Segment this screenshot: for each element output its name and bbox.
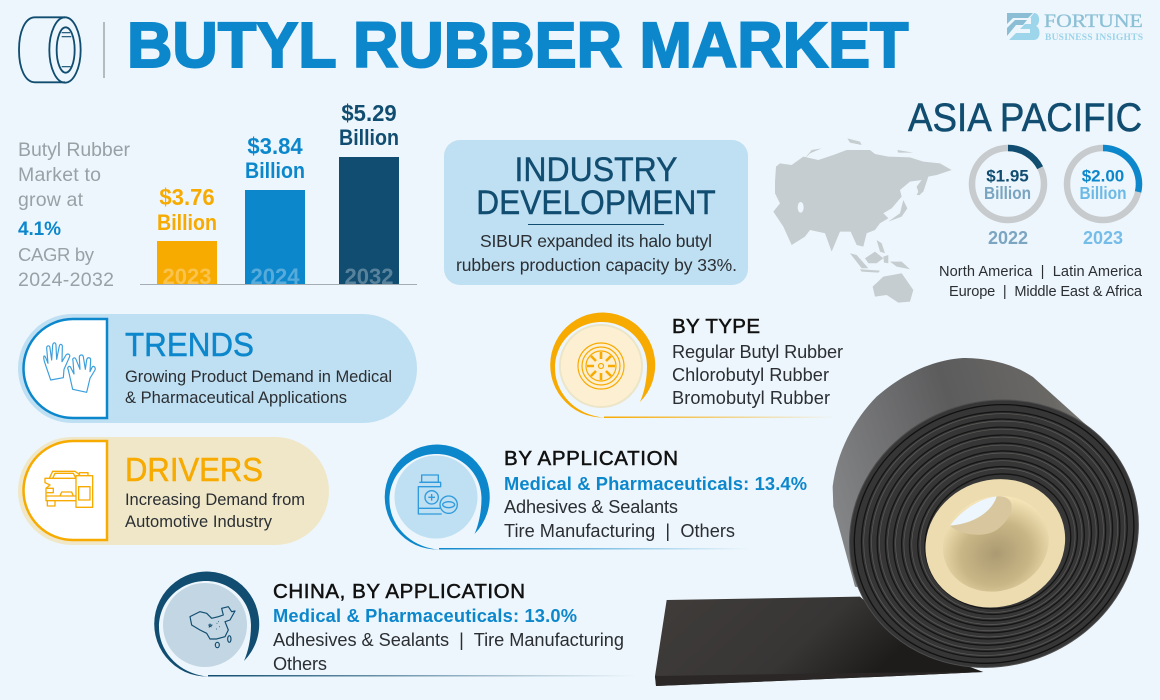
bar chart — [140, 101, 417, 289]
heading: Asia Pacific: ASIA PACIFIC — [908, 96, 1142, 140]
bar 2032 — [339, 101, 399, 289]
flat sheet — [655, 597, 983, 686]
CAGR text block: Butyl Rubber — [18, 139, 130, 161]
bar 2023 — [157, 185, 217, 289]
panel: industry development: rubbers production capacity by 33%. — [456, 255, 737, 275]
bar 2032: 2032 — [345, 264, 393, 289]
panel: industry development — [444, 140, 748, 285]
segment: China by application — [154, 572, 636, 677]
segment: by application — [385, 445, 807, 550]
divider — [103, 22, 105, 78]
map: Asia Pacific — [773, 138, 952, 303]
donut 2022: $1.95 — [986, 166, 1029, 186]
panel: industry development: INDUSTRY — [514, 150, 678, 188]
bar 2023: $3.76 — [159, 185, 215, 210]
other regions: Europe | Middle East & Africa — [949, 284, 1143, 300]
donut 2023 — [1067, 148, 1139, 248]
CAGR text block: 2024-2032 — [18, 269, 114, 291]
panel: industry development: DEVELOPMENT — [476, 183, 716, 221]
panel: drivers: DRIVERS — [125, 451, 263, 488]
panel: drivers: Increasing Demand from — [125, 491, 305, 509]
panel: industry development: SIBUR expanded its halo butyl — [480, 231, 712, 251]
segment: by application: Medical & Pharmaceuticals: 13.4% — [504, 473, 807, 494]
segment: by type: Chlorobutyl Rubber — [672, 365, 829, 385]
bar 2023: Billion — [157, 211, 217, 235]
other regions: North America | Latin America — [939, 264, 1143, 280]
segment: by application: BY APPLICATION — [504, 447, 678, 470]
segment: by type: Regular Butyl Rubber — [672, 342, 843, 362]
bar 2023: 2023 — [163, 264, 211, 289]
donut 2022: 2022 — [988, 228, 1028, 248]
panel: trends: & Pharmaceutical Applications — [125, 389, 347, 407]
segment: by type — [550, 313, 843, 418]
CAGR text block: Market to — [18, 164, 101, 186]
panel: trends: Growing Product Demand in Medical — [125, 368, 392, 386]
donut 2022 — [972, 148, 1044, 248]
donut 2022: Billion — [984, 184, 1031, 203]
bar 2024: $3.84 — [247, 134, 303, 159]
CAGR text block: 4.1% — [18, 219, 61, 240]
icon: rubber roll — [19, 17, 81, 83]
illustration: rubber roll — [655, 358, 1160, 700]
icon: gloves — [44, 343, 95, 392]
segment: China by application: CHINA, BY APPLICATION — [273, 580, 525, 603]
icon: medicine bottle — [418, 475, 457, 514]
end face rings — [812, 360, 1160, 700]
logo: Fortune Business Insights: FORTUNE — [1044, 11, 1143, 32]
bar 2024 — [245, 134, 305, 289]
cylinder body — [833, 358, 1103, 613]
donut 2023: 2023 — [1083, 228, 1123, 248]
segment: by application: Adhesives & Sealants — [504, 497, 678, 517]
icon: car and container — [45, 471, 93, 507]
panel: drivers — [18, 437, 329, 545]
cardboard core — [907, 460, 1083, 627]
panel: trends: TRENDS — [125, 326, 254, 363]
CAGR text block: grow at — [18, 189, 84, 211]
bar 2032: Billion — [339, 126, 399, 150]
CAGR text block — [18, 139, 130, 291]
icon: wheel — [578, 343, 624, 389]
segment: China by application: Others — [273, 654, 327, 674]
other regions — [939, 264, 1143, 300]
icon: China map — [190, 607, 235, 648]
segment: by type: Bromobutyl Rubber — [672, 388, 830, 408]
logo: Fortune Business Insights — [1007, 11, 1143, 43]
panel: trends — [18, 314, 417, 423]
bar 2024: 2024 — [251, 264, 300, 289]
CAGR text block: CAGR by — [18, 244, 95, 265]
bar 2024: Billion — [245, 159, 305, 183]
bar 2032: $5.29 — [341, 101, 397, 126]
segment: China by application: Adhesives & Sealants | Tire Manufacturing — [273, 630, 624, 650]
title: BUTYL RUBBER MARKET — [127, 11, 909, 81]
segment: China by application: Medical & Pharmaceuticals: 13.0% — [273, 605, 577, 626]
segment: by type: BY TYPE — [672, 315, 760, 338]
donut 2023: $2.00 — [1082, 166, 1124, 186]
logo: Fortune Business Insights: BUSINESS INSIGHTS — [1045, 33, 1143, 43]
donut 2023: Billion — [1079, 184, 1127, 203]
panel: drivers: Automotive Industry — [125, 513, 273, 531]
segment: by application: Tire Manufacturing | Others — [504, 521, 735, 541]
